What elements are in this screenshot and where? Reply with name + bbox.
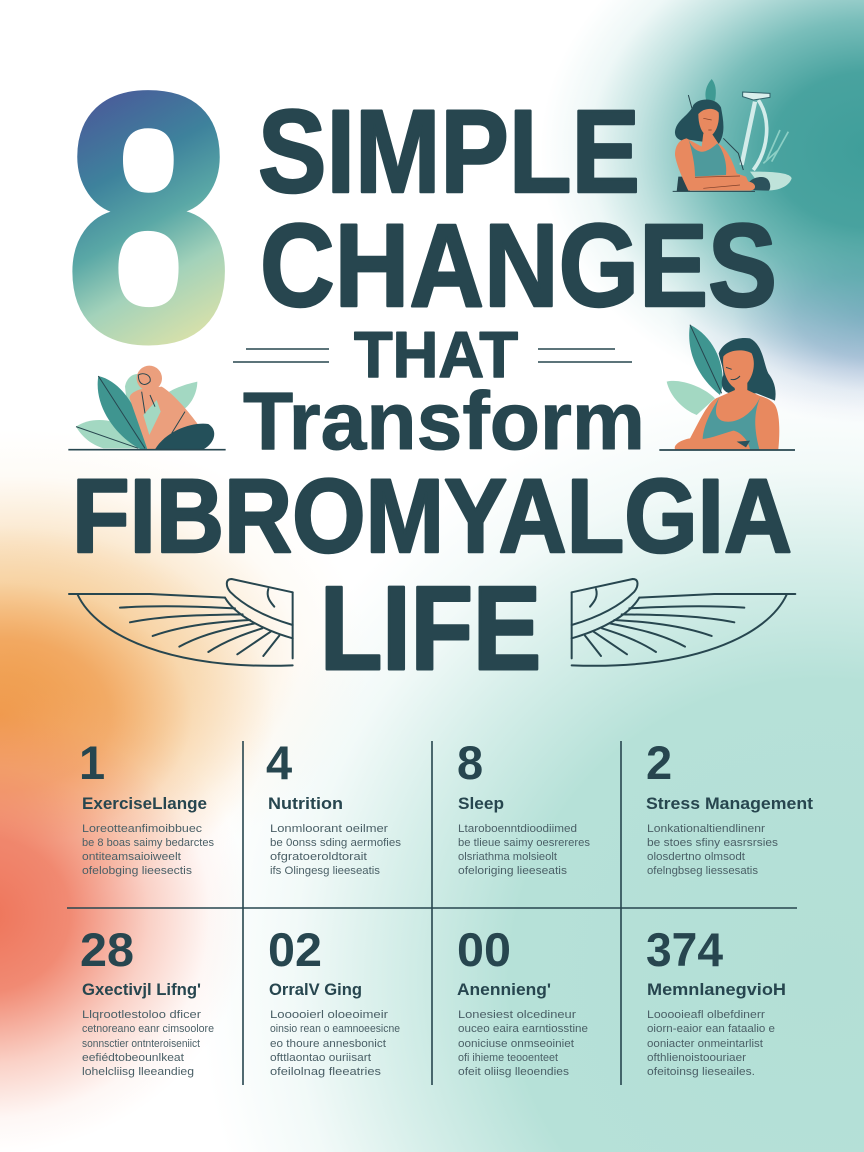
panel: item 1: ofelobging lieesectis (82, 865, 193, 877)
panel: item 4: Lonmloorant oeilmer (270, 823, 388, 835)
icon: woman with device (673, 79, 792, 192)
panel: item 374: ooniacter onmeintarlist (647, 1038, 763, 1050)
panel: item 28: 28 (80, 923, 134, 976)
panel: item 2: olosdertno olmsodt (647, 851, 745, 863)
panel: item 1: be 8 boas saimy bedarctes (82, 837, 214, 849)
panel: item 28 (80, 923, 214, 1078)
panel: item 1: ExerciseLlange (82, 795, 207, 813)
panel: item 02: ofttlaontao ouriisart (270, 1052, 371, 1064)
panel: item 28: sonnsctier ontnteroiseniict (82, 1038, 200, 1050)
panel: item 4: be 0onss sding aermofies (270, 837, 402, 849)
title: CHANGES: CHANGES (260, 200, 777, 332)
title: SIMPLE: SIMPLE (258, 86, 640, 218)
icon: seated person with leaves (68, 366, 226, 450)
title: Transform: Transform (243, 376, 645, 467)
panel: item 00: 00 (457, 923, 511, 976)
panel: item 4: ifs Olingesg lieeseatis (270, 865, 381, 877)
panel: item 8: be tlieue saimy oesrereres (458, 837, 590, 849)
title: FIBROMYALGIA: FIBROMYALGIA (72, 458, 792, 575)
panel: item 1: 1 (79, 736, 105, 789)
panel: item 00: ouceo eaira earntiosstine (458, 1023, 588, 1035)
panel: item 28: Gxectivjl Lifng' (82, 981, 201, 999)
panel: item 02: Looooierl oloeoimeir (270, 1009, 388, 1021)
grid lines (67, 741, 797, 1085)
panel: item 8: Sleep (458, 795, 504, 813)
panel: item 374: ofthlienoistoouriaer (647, 1052, 746, 1064)
panel: item 2: ofelngbseg liessesatis (647, 865, 759, 877)
title: LIFE: LIFE (320, 562, 541, 695)
panel: item 374: 374 (646, 923, 723, 976)
icon: right wing (572, 579, 795, 666)
panel: item 00: Lonesiest olcedineur (458, 1009, 576, 1021)
panel: item 02: oinsio rean o eamnoeesicne (270, 1023, 400, 1035)
panel: item 8: olsriathma molsieolt (458, 851, 557, 863)
panel: item 374: Looooieafl olbefdinerr (647, 1009, 765, 1021)
panel: item 02: ofeilolnag fleeatries (270, 1066, 382, 1078)
panel: item 374: MemnlanegvioH (647, 981, 786, 999)
panel: item 2: Lonkationaltiendlinenr (647, 823, 765, 835)
panel: item 00: ofi ihieme teooenteet (458, 1052, 558, 1064)
icon: left wing (69, 579, 293, 666)
panel: item 8: 8 (457, 736, 483, 789)
decorative lines beside THAT (233, 349, 632, 362)
panel: item 1: ontiteamsaioiweelt (82, 851, 181, 863)
panel: item 02: OrralV Ging (269, 981, 362, 999)
panel: item 28: Llqrootlestoloo dficer (82, 1009, 201, 1021)
panel: item 28: eefiédtobeounlkeat (82, 1052, 184, 1064)
panel: item 4 (266, 736, 402, 877)
panel: item 8: Ltaroboenntdioodiimed (458, 823, 577, 835)
panel: item 374: ofeitoinsg lieseailes. (647, 1066, 755, 1078)
title: THAT: THAT (354, 319, 518, 391)
panel: item 374: oiorn-eaior ean fataalio e (647, 1023, 775, 1035)
panel: item 1: Loreotteanfimoibbuec (82, 823, 203, 835)
panel: item 00 (457, 923, 588, 1078)
panel: item 00: ooniciuse onmseoiniet (458, 1038, 574, 1050)
panel: item 2: be stoes sfiny easrsrsies (647, 837, 779, 849)
panel: item 2 (646, 736, 814, 877)
panel: item 28: cetnoreano eanr cimsoolore (82, 1023, 214, 1035)
panel: item 00: ofeit oliisg lleoendies (458, 1066, 570, 1078)
panel: item 1 (79, 736, 214, 877)
panel: item 00: Anennieng' (457, 981, 551, 999)
panel: item 02: 02 (268, 923, 322, 976)
panel: item 4: ofgratoeroldtorait (270, 851, 367, 863)
panel: item 8: ofeloriging lieeseatis (458, 865, 568, 877)
panel: item 02: eo thoure annesbonict (270, 1038, 386, 1050)
panel: item 02 (268, 923, 400, 1078)
panel: item 2: Stress Management (646, 795, 814, 813)
panel: item 374 (646, 923, 786, 1078)
icon: smiling woman with leaves (659, 325, 795, 450)
panel: item 4: Nutrition (268, 795, 343, 813)
panel: item 2: 2 (646, 736, 672, 789)
panel: item 8 (457, 736, 590, 877)
panel: item 28: lohelcliisg lleeandieg (82, 1066, 194, 1078)
panel: item 4: 4 (266, 736, 292, 789)
big numeral 8: 8 (64, 20, 232, 416)
